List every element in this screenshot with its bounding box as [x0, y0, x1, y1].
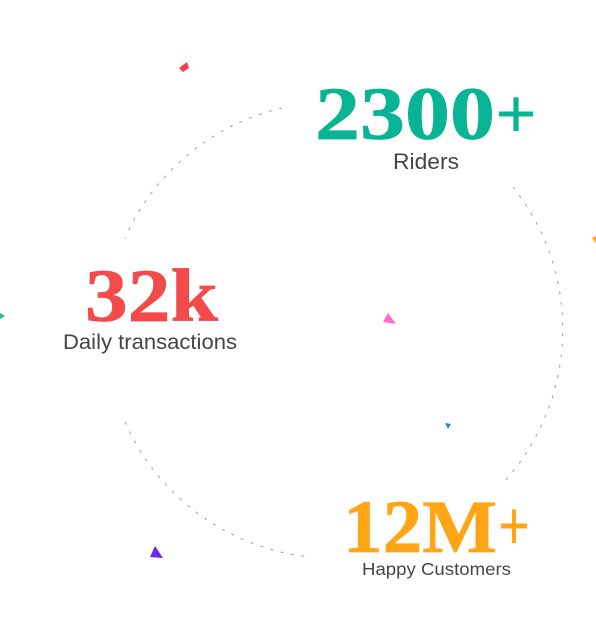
confetti: orange [592, 236, 596, 243]
confetti: purple [150, 546, 163, 558]
customers label: Happy Customers [362, 559, 511, 579]
customers plus sign: + [498, 486, 530, 566]
riders number: 2300 [315, 73, 495, 156]
stat: happy customers [343, 486, 530, 579]
transactions number: 32k [85, 255, 218, 338]
dashed circle arc: right [503, 187, 563, 483]
stat: riders [315, 73, 537, 174]
customers number: 12M [343, 486, 497, 569]
stat: daily transactions [63, 255, 237, 354]
dashed circle arc: top left [125, 108, 282, 238]
dashed circle arc: bottom left [125, 422, 310, 557]
riders label: Riders [393, 149, 459, 174]
confetti: blue [445, 423, 451, 429]
confetti: pink [383, 313, 396, 324]
confetti: red [179, 62, 189, 72]
transactions label: Daily transactions [63, 331, 237, 354]
riders plus sign: + [495, 74, 537, 154]
confetti: teal [0, 313, 5, 319]
